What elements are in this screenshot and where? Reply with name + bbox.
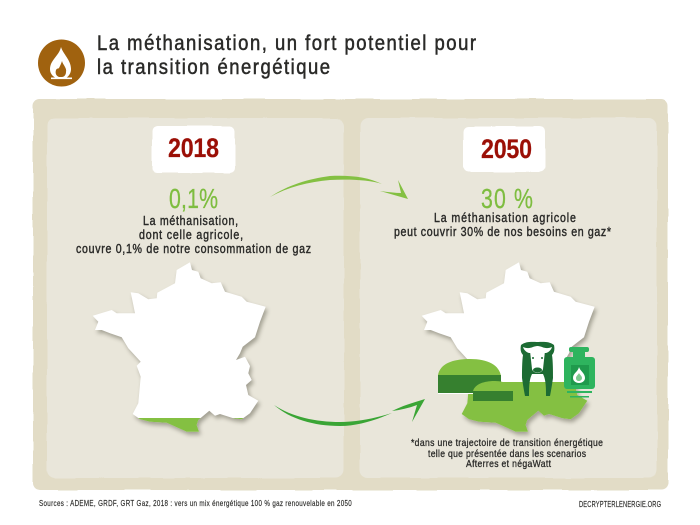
icon: cow [521, 342, 554, 396]
sources: Sources : ADEME, GRDF, GRT Gaz, 2018 : vers un mix énergétique 100 % gaz renouvelable en 2050 [39, 499, 352, 508]
footnote [411, 437, 603, 470]
arrow: bottom [274, 399, 425, 426]
year box 2050: 2050 [481, 134, 532, 164]
arrow: top [270, 176, 408, 199]
icon: small digester [473, 381, 513, 401]
text: 2050 description [394, 211, 611, 239]
map: France 2050 [422, 262, 597, 435]
footnote: telle que présentée dans les scenarios [428, 448, 586, 460]
year box 2050 [463, 126, 545, 172]
map: France 2018 [93, 262, 268, 435]
stat 0,1%: 0,1% [169, 183, 218, 215]
text: 2050 description: La méthanisation agricole [434, 211, 576, 225]
title: La méthanisation, un fort potentiel pour [97, 32, 476, 55]
icon: flame badge [38, 40, 85, 86]
icon: gas bottle [564, 347, 595, 398]
year box 2018 [152, 126, 235, 173]
stat 30 %: 30 % [481, 183, 533, 215]
text: 2018 description: couvre 0,1% de notre consommation de gaz [76, 242, 311, 256]
panel: 2050 [360, 118, 657, 478]
text: 2018 description: dont celle agricole, [139, 228, 243, 242]
year box 2018: 2018 [168, 133, 219, 163]
text: 2018 description: La méthanisation, [143, 214, 238, 228]
icon: large digester [438, 359, 501, 394]
website credit: DECRYPTERLENERGIE.ORG [579, 501, 661, 509]
footnote: *dans une trajectoire de transition énergétique [411, 437, 603, 449]
text: 2050 description: peut couvrir 30% de nos besoins en gaz* [394, 225, 611, 239]
text: 2018 description [76, 214, 311, 256]
outer beige panel [33, 99, 668, 490]
title: la transition énergétique [97, 56, 330, 79]
footnote: Afterres et négaWatt [466, 458, 551, 470]
panel: 2018 [47, 118, 344, 478]
title [97, 32, 476, 79]
